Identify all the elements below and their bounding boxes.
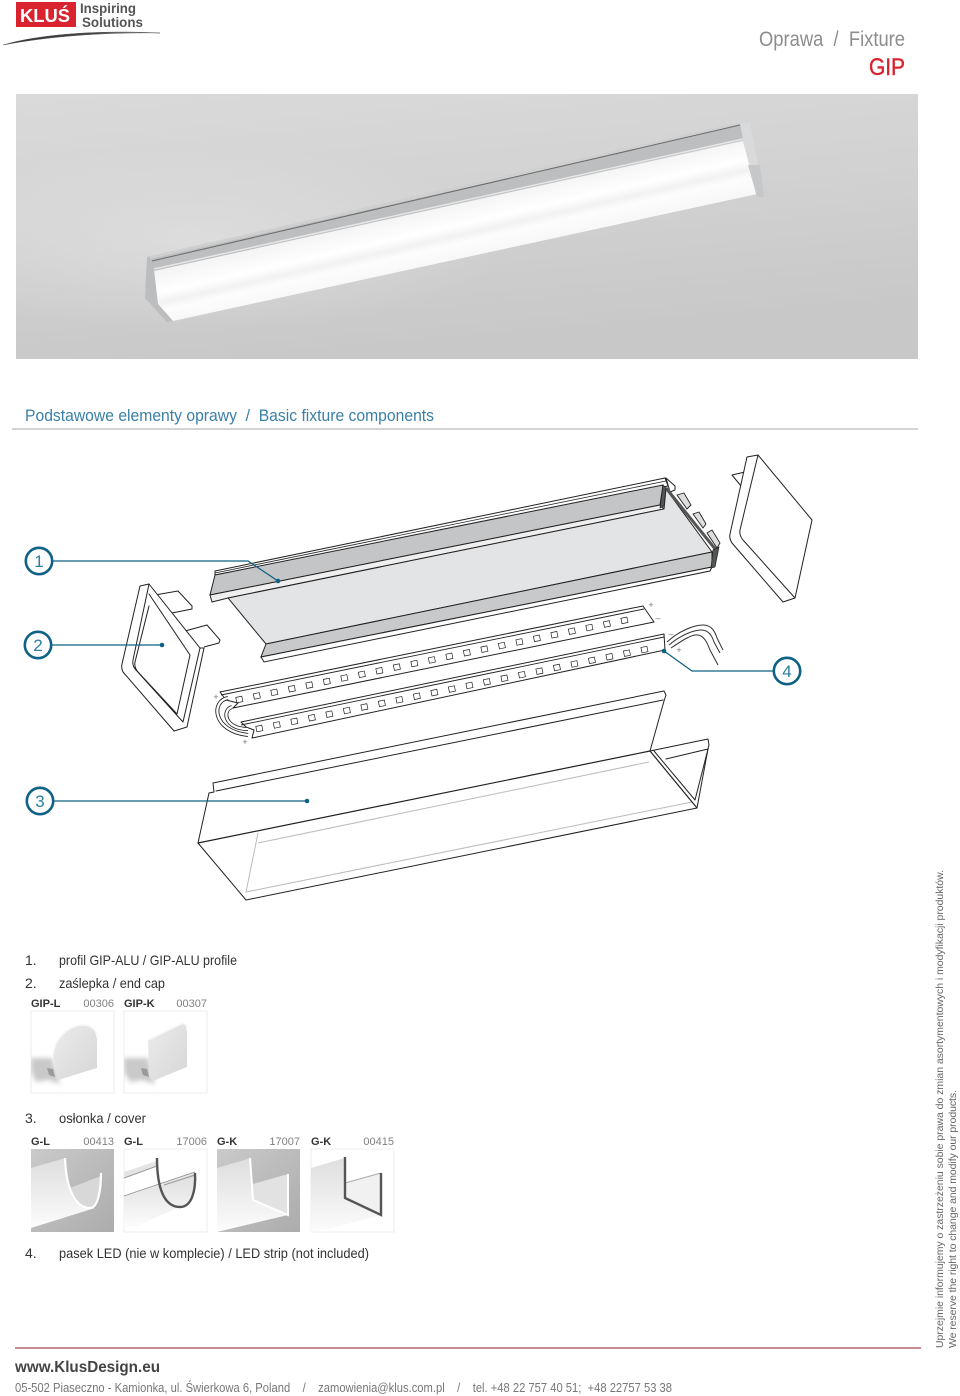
logo: KLUS Inspiring Solutions: Solutions — [82, 14, 143, 30]
profile end section — [666, 478, 675, 492]
end cap variant GIP-K: GIP-K — [124, 998, 155, 1010]
strip wires — [667, 625, 723, 665]
legend item 2: end cap: zaślepka / end cap — [59, 975, 165, 991]
legend item 2: end cap: 2. — [25, 975, 37, 991]
part: LED strip: – — [668, 629, 674, 639]
cover variant G-L 17006 — [124, 1136, 207, 1232]
callout 4 — [662, 649, 800, 684]
end cap variant GIP-L — [31, 998, 114, 1093]
legend item 1: profile: 1. — [25, 952, 37, 968]
cover variant G-L 00413 — [31, 1136, 114, 1232]
cover variant G-K 17007: G-K — [217, 1136, 237, 1148]
cover variant G-L 00413: G-L — [31, 1136, 50, 1148]
logo: KLUS Inspiring Solutions: KLUŚ — [20, 5, 70, 26]
legend item 3: cover: osłonka / cover — [59, 1110, 146, 1126]
cover variant G-K 17007: 17007 — [269, 1136, 300, 1148]
part: cover — [198, 691, 709, 900]
side note: rotated disclaimer: We reserve the right to change and modify our products. — [947, 1090, 959, 1348]
footer — [14, 1348, 921, 1395]
footer: 05-502 Piaseczno - Kamionka, ul. Świerkowa 6, Poland / zamowienia@klus.com.pl / tel. +48 22 757 40 51; +48 22757 53 38 — [15, 1380, 672, 1395]
cover variant G-K 17007 — [217, 1136, 300, 1232]
callout 1: 1 — [34, 552, 44, 571]
callout 3 — [27, 788, 309, 814]
part: LED strip: + — [648, 600, 654, 610]
heading: fixture type: GIP — [869, 54, 905, 81]
heading: fixture type — [759, 28, 905, 81]
part: LED strip: – — [655, 613, 661, 623]
part: LED strip: + — [676, 645, 682, 655]
end cap variant GIP-K: 00307 — [176, 998, 207, 1010]
legend item 3: cover — [25, 1110, 146, 1126]
callout 1 — [26, 548, 280, 583]
part: LED strip — [213, 600, 723, 747]
callout 3: 3 — [35, 792, 45, 811]
polarity signs: + — [213, 692, 219, 702]
cover variant G-K 00415: 00415 — [363, 1136, 394, 1148]
side note: rotated disclaimer — [934, 870, 959, 1348]
callout 2: 2 — [33, 636, 43, 655]
callout 4: 4 — [782, 662, 792, 681]
end cap variant GIP-L: 00306 — [83, 998, 114, 1010]
cover variant G-L 00413: 00413 — [83, 1136, 114, 1148]
legend item 4: LED strip: pasek LED (nie w komplecie) / LED strip (not included) — [59, 1245, 369, 1261]
side note: rotated disclaimer: Uprzejmie informujemy o zastrzeżeniu sobie prawa do zmian asortymentowych i modyfikacji produktów. — [934, 870, 946, 1348]
cover variant G-L 17006: G-L — [124, 1136, 143, 1148]
part: aluminium profile — [210, 478, 720, 662]
end cap variant GIP-L: GIP-L — [31, 998, 61, 1010]
part: LED strip: + — [242, 737, 248, 747]
exploded diagram — [122, 455, 812, 900]
part: right end cap — [730, 455, 812, 602]
legend item 4: LED strip: 4. — [25, 1245, 37, 1261]
callout 2 — [25, 632, 164, 658]
strip connector loop — [217, 698, 248, 735]
legend item 1: profile: profil GIP-ALU / GIP-ALU profile — [59, 952, 237, 968]
heading: fixture type: Oprawa / Fixture — [759, 28, 905, 51]
footer: www.KlusDesign.eu — [14, 1359, 160, 1376]
section heading: basic components: Podstawowe elementy oprawy / Basic fixture components — [25, 406, 434, 425]
cover variant G-K 00415 — [311, 1136, 394, 1232]
logo: KLUS Inspiring Solutions: Inspiring — [80, 0, 136, 16]
cover variant G-L 17006: 17006 — [176, 1136, 207, 1148]
cover variant G-K 00415: G-K — [311, 1136, 331, 1148]
photo: ceiling fixture — [16, 94, 918, 359]
part: left end cap — [122, 584, 220, 731]
logo: KLUS Inspiring Solutions — [3, 0, 160, 45]
end cap variant GIP-K — [124, 998, 207, 1093]
legend item 3: cover: 3. — [25, 1110, 37, 1126]
